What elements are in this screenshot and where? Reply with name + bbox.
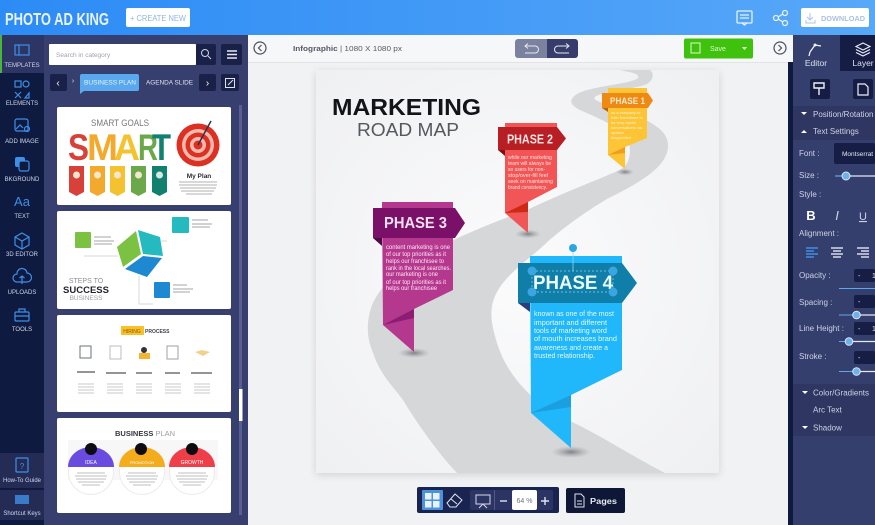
phase 1 text: be very useful [611, 120, 636, 125]
opacity control [799, 269, 875, 288]
spacing control [799, 295, 875, 319]
search box: Search in category [56, 52, 111, 59]
list button [221, 44, 242, 65]
canvas toolbar [248, 35, 793, 63]
smart lettering: T [152, 127, 171, 168]
phase 1 text: spoken [611, 130, 624, 135]
template card: business plan [57, 418, 231, 513]
template card: hiring process: HIRING [123, 329, 141, 335]
smart lettering: M [87, 127, 118, 168]
stroke control: - [858, 355, 861, 362]
download button [801, 8, 869, 27]
scrollbar [239, 105, 242, 515]
heading: MARKETING [332, 94, 481, 120]
shortcut keys: Shortcut Keys [3, 511, 41, 517]
opacity control: - [858, 273, 861, 280]
collapsed sections: Color/Gradients [813, 388, 869, 398]
growth circle [169, 443, 215, 494]
heading [332, 94, 481, 140]
phase 4 text [534, 309, 617, 360]
template card: smart goals: SMART GOALS [91, 118, 149, 128]
phase 3 marker [373, 202, 465, 358]
line height control [799, 322, 875, 345]
phase 3 text: of our top priorities as it [386, 252, 446, 258]
success heading: STEPS TO [69, 278, 104, 285]
opacity control: Opacity : [799, 271, 831, 280]
icon: share [774, 10, 788, 26]
layer tab [840, 35, 875, 71]
phase 1 text [611, 110, 644, 140]
next arrow [774, 42, 786, 54]
editor tab [805, 44, 827, 68]
category tabs [50, 74, 239, 94]
font selector: Montserrat [842, 151, 873, 158]
spacing control: Spacing : [799, 298, 832, 307]
phase 3 text: rank in the local searches. [386, 266, 451, 272]
my plan: My Plan [187, 173, 211, 180]
text tool [14, 194, 31, 220]
text tool: Aa [14, 194, 31, 209]
success heading [63, 278, 109, 302]
elements [6, 81, 38, 107]
success heading: BUSINESS [70, 295, 103, 302]
uploads [8, 268, 36, 296]
spacing control: - [858, 299, 861, 306]
logo: PHOTO AD KING [5, 9, 109, 29]
growth circle: GROWTH [181, 460, 204, 466]
phase 1 text: blogs/video [611, 135, 632, 140]
pages button: Pages [590, 497, 618, 506]
style buttons: Style : [799, 190, 821, 199]
phase 2 marker [498, 123, 566, 238]
phase 1 text: conversations via [611, 125, 643, 130]
category tabs: AGENDA SLIDE [146, 80, 193, 86]
add image: ADD IMAGE [5, 139, 39, 145]
heading: ROAD MAP [357, 120, 459, 140]
settings headers: Text Settings [813, 127, 859, 136]
phase 3 text [386, 245, 451, 292]
top bar [0, 0, 875, 35]
phase 2 text: so users for non- [508, 167, 545, 173]
search box [49, 44, 216, 65]
download button: DOWNLOAD [821, 14, 866, 23]
undo redo [515, 39, 578, 58]
save button: Save [710, 46, 726, 53]
font selector [799, 143, 875, 164]
3d editor: 3D EDITOR [6, 252, 39, 258]
tool buttons [810, 79, 873, 99]
artboard shadow [316, 72, 719, 475]
category tabs: › [72, 78, 75, 85]
background: BKGROUND [5, 177, 40, 183]
category tabs: ‹ [56, 78, 60, 89]
settings headers [793, 106, 875, 140]
phase 4 text: tools of marketing word [534, 326, 607, 335]
template card: hiring process [57, 315, 231, 412]
line height control: Line Height : [799, 324, 844, 333]
left icon rail [0, 35, 44, 525]
size slider: Size : [799, 171, 819, 180]
process icons [80, 346, 210, 359]
banners [69, 166, 167, 196]
cube [117, 230, 163, 277]
phase 3 text: of our top priorities as it [386, 280, 446, 286]
phase 4 text: important and different [534, 318, 608, 327]
how-to guide: ? [20, 462, 25, 471]
create new button [126, 8, 190, 27]
stroke control: Stroke : [799, 352, 827, 361]
phase 4 text: awareness and create a [534, 343, 609, 352]
alignment buttons: Alignment : [799, 229, 839, 238]
text tool: TEXT [14, 214, 30, 220]
canvas size label: Infographic | 1080 X 1080 px [293, 44, 402, 53]
target [176, 121, 220, 166]
category tabs: › [206, 78, 209, 89]
promotion circle: PROMOTION [130, 460, 154, 465]
uploads: UPLOADS [8, 290, 36, 296]
workspace background [248, 35, 793, 525]
editor tab: Editor [805, 58, 827, 68]
collapsed sections: Shadow [813, 424, 842, 432]
phase 2 text: seek on maintaining [508, 179, 553, 185]
smart lettering [68, 127, 171, 168]
style buttons: U [859, 211, 867, 223]
phase 4 text: known as one of the most [534, 309, 615, 318]
phase 3 marker: PHASE 3 [384, 215, 447, 232]
zoom controls: 64 % [517, 498, 532, 505]
phase 2 text: team will always be [508, 161, 551, 167]
active tab: templates: TEMPLATES [4, 63, 40, 69]
settings headers: Position/Rotation [813, 110, 873, 119]
3d editor [6, 233, 39, 258]
icon: message [737, 11, 752, 25]
previous arrow [254, 42, 266, 54]
road [368, 70, 668, 473]
line height control: - [858, 326, 861, 333]
template card: smart goals [57, 107, 231, 205]
layer tab: Layer [852, 58, 874, 68]
idea circle: IDEA [85, 460, 97, 466]
bottom canvas controls [417, 487, 625, 513]
how-to guide: How-To Guide [3, 478, 42, 484]
save button [684, 38, 753, 58]
tools: TOOLS [12, 327, 32, 333]
phase 4 text: of mouth increases brand [534, 334, 617, 343]
alignment buttons [799, 229, 869, 257]
smart lettering: S [68, 127, 89, 168]
zoom controls [470, 490, 553, 510]
grid toggle [422, 490, 443, 510]
elements: ELEMENTS [6, 101, 38, 107]
step icons [75, 232, 91, 248]
smart lettering: A [114, 127, 140, 168]
phase 2 marker: PHASE 2 [507, 132, 553, 146]
eraser icon [447, 494, 462, 507]
style buttons: B [806, 208, 816, 223]
template card: business plan: BUSINESS PLAN [115, 429, 175, 438]
shortcut keys [0, 490, 44, 520]
phase 3 text: helps our franchisee to [386, 259, 445, 265]
infographic artboard [316, 70, 719, 473]
collapsed sections: Arc Text [813, 406, 843, 414]
how-to guide [0, 453, 44, 488]
selection handles [528, 244, 618, 296]
stroke control [799, 351, 875, 375]
phase 1 text: train franchisee to [611, 115, 644, 120]
template card: steps to success [57, 211, 231, 309]
template card: hiring process: PROCESS [145, 329, 170, 335]
active tab: templates [0, 35, 44, 73]
create new button: + CREATE NEW [130, 13, 186, 23]
template panel [44, 35, 248, 525]
phase 1 marker: PHASE 1 [610, 96, 645, 106]
tools [12, 309, 32, 333]
phase 2 text [508, 155, 553, 191]
pages button [566, 488, 625, 513]
collapsed sections [793, 384, 875, 436]
phase 3 text: content marketing is one [386, 245, 451, 251]
phase 2 text: stop/over-fill feel [508, 173, 548, 179]
smart lettering: R [138, 127, 158, 168]
promotion circle [119, 443, 165, 494]
size slider [799, 171, 875, 180]
style buttons [799, 190, 867, 223]
idea circle [68, 443, 114, 494]
style buttons: I [835, 208, 839, 223]
phase 1 marker [602, 88, 653, 176]
background [5, 157, 40, 183]
phase 4 marker [518, 244, 637, 458]
phase 4 marker: PHASE 4 [533, 273, 613, 294]
phase 2 text: while our marketing [508, 155, 552, 161]
category tabs: BUSINESS PLAN [84, 80, 136, 86]
right editor panel [788, 35, 875, 525]
success heading: SUCCESS [63, 285, 109, 296]
phase 2 text: brand consistency. [508, 185, 547, 191]
add image [5, 119, 39, 145]
phase 3 text: helps our franchisee [386, 286, 438, 292]
phase 3 text: our marketing is one [386, 272, 439, 278]
phase 4 text: trusted relationship. [534, 351, 595, 360]
phase 1 text: as a company to [611, 110, 641, 115]
font selector: Font : [799, 149, 819, 158]
